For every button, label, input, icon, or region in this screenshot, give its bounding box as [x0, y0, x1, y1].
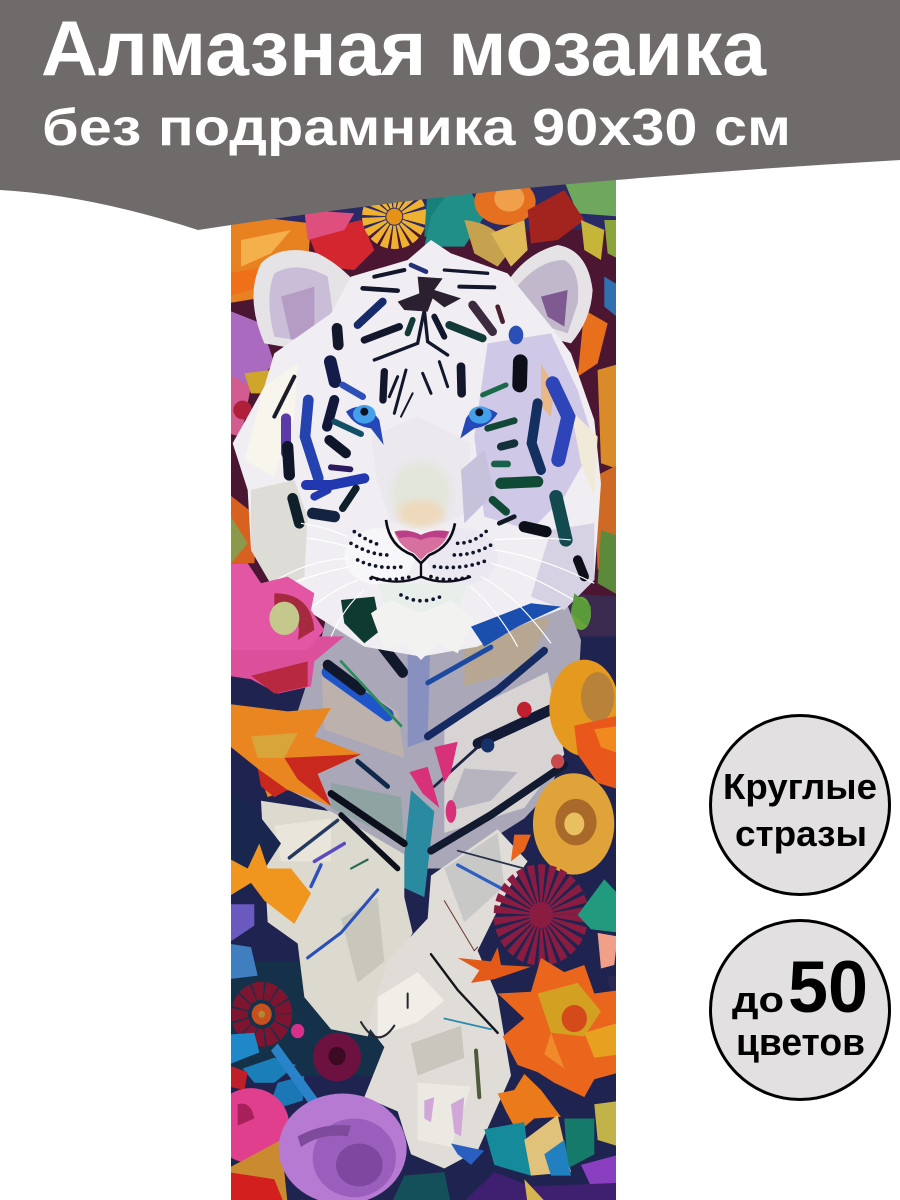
- ears: [253, 245, 593, 357]
- pink nose: [386, 520, 455, 563]
- neck ruff: [341, 597, 561, 660]
- painting: white tiger among flowers: [213, 163, 621, 1200]
- tiger head: [233, 240, 601, 660]
- flower: orange lily: [231, 704, 361, 806]
- badge: up to 50 colours: до: [732, 979, 784, 1020]
- badge: round rhinestones: Круглые: [723, 766, 877, 807]
- side and cheek stripes: [274, 377, 584, 577]
- muzzle and whisker pads: [349, 530, 492, 603]
- flower: purple rose: [279, 1094, 407, 1200]
- flower: pink rose: [231, 1088, 289, 1200]
- flower: small orange, upper: [458, 947, 531, 983]
- flower: maroon spiky: [512, 884, 570, 946]
- badge: round rhinestones: [710, 716, 890, 894]
- flower: small orange, lower: [498, 1074, 561, 1133]
- badge: round rhinestones: стразы: [735, 813, 867, 854]
- whiskers: [261, 523, 594, 647]
- tiger chest: [274, 597, 581, 897]
- title: Алмазная мозаика: [41, 4, 767, 92]
- blue eyes: [346, 405, 498, 445]
- flower: orange succulent: [498, 958, 621, 1097]
- flower: pink lotus: [228, 636, 344, 694]
- lower painting: [213, 597, 621, 1200]
- leaves and dark flowers, left: [228, 904, 361, 1111]
- flower: yellow rose, top right: [549, 660, 621, 790]
- fur shading: [244, 333, 598, 610]
- badge: up to 50 colours: цветов: [736, 1022, 865, 1064]
- header banner: [0, 0, 900, 230]
- flowers behind the tiger head: [228, 163, 621, 653]
- badge: up to 50 colours: 50: [788, 947, 868, 1028]
- flower: orange lily, left: [228, 844, 311, 924]
- subtitle: без подрамника 90х30 см: [42, 99, 791, 157]
- mouth: [371, 562, 471, 582]
- forehead stripes: [330, 265, 520, 417]
- tiger front paws: [261, 801, 528, 1169]
- flower: pink blossoms in the chest: [409, 742, 458, 823]
- body stripes: [289, 640, 564, 1097]
- leaves: teal and purple at the bottom right: [391, 1101, 621, 1200]
- flower: gold rose: [511, 773, 614, 875]
- badge: up to 50 colours: [710, 920, 890, 1100]
- head and mane: [233, 240, 601, 657]
- flower: pink lotus top: [231, 563, 591, 640]
- leaves: teal right: [578, 879, 616, 991]
